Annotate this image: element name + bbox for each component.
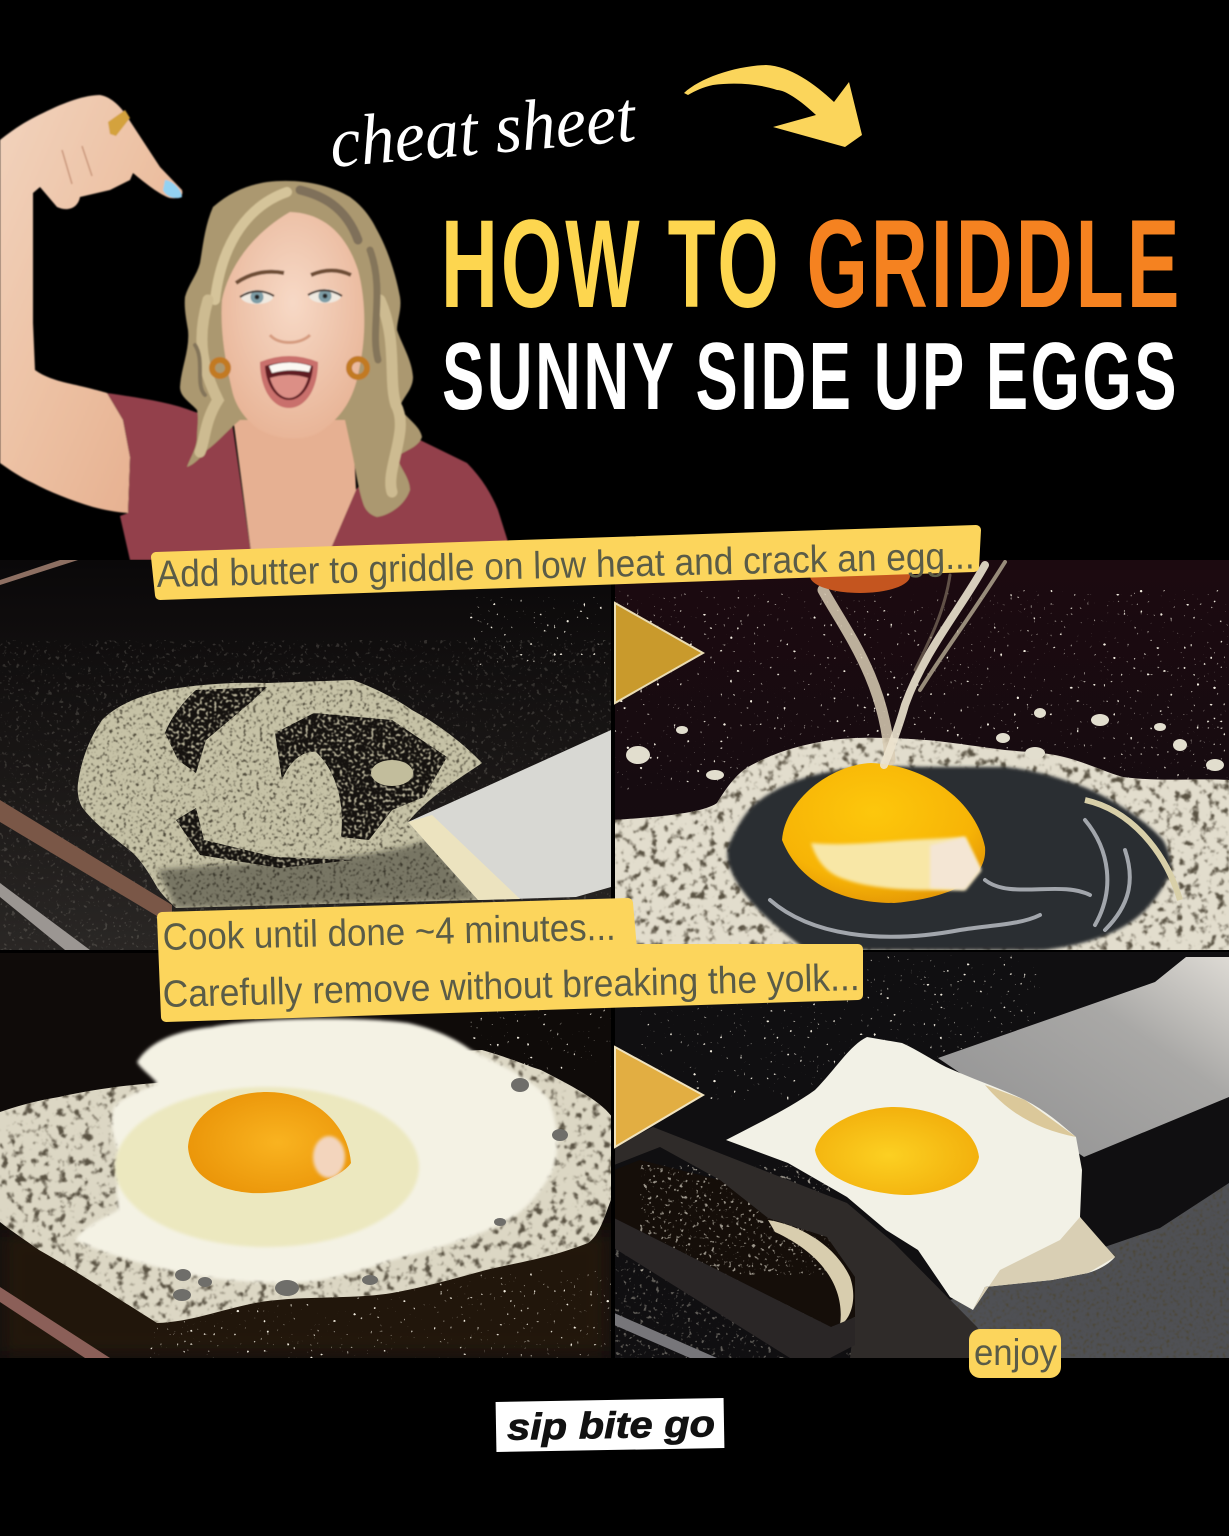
griddle lower bar: [0, 883, 90, 950]
caption background: [156, 530, 976, 595]
neck and chest: [232, 410, 356, 560]
lower griddle bar: [614, 1313, 717, 1358]
light streaks on griddle: [770, 820, 1130, 937]
handle slot interior: [614, 1160, 855, 1327]
griddle rim: [0, 1287, 110, 1358]
fried egg: [726, 1037, 1115, 1310]
egg crust in slot: [768, 1220, 853, 1325]
spatula handle upper arm: [614, 1127, 997, 1358]
photo: woman pointing: [0, 95, 509, 560]
handwritten label: cheat sheet: cheat sheet: [326, 76, 640, 183]
gold ring: [108, 110, 130, 136]
dark patches in butter: [165, 687, 447, 868]
top right oil glints: [470, 597, 605, 667]
egg white: [75, 1019, 557, 1283]
lower foam shade: [157, 840, 478, 908]
title line 2: SUNNY SIDE UP EGGS: [442, 323, 1177, 430]
spatula handle lower arm: [614, 1218, 855, 1358]
mouth: [260, 356, 318, 408]
logo: sip bite go: sip bite go: [507, 1403, 715, 1448]
panel: cracking an egg: [614, 559, 1229, 950]
yolk: [782, 763, 985, 903]
panel: butter melting on griddle: [0, 560, 611, 950]
caption text: remove: Carefully remove without breaking the yolk...: [162, 957, 860, 1016]
bubbles around egg: [173, 1078, 568, 1301]
panel: egg cooked on griddle: [0, 953, 612, 1358]
spatula blade: [938, 957, 1229, 1157]
yolk: [188, 1092, 351, 1193]
egg shell: [810, 574, 910, 593]
blue nail: [163, 180, 182, 198]
hair: [180, 181, 422, 517]
shirt: [107, 393, 509, 560]
caption text: Add butter to griddle on low heat and crack an egg...: [156, 535, 975, 596]
face: [222, 212, 364, 439]
title: [441, 195, 1179, 430]
caption: enjoy: enjoy: [974, 1332, 1057, 1373]
butter line curve: [1085, 800, 1180, 900]
butter ring: [614, 738, 1229, 950]
top right specks: [470, 1008, 611, 1070]
earrings: [212, 359, 367, 377]
griddle top edge: [0, 560, 78, 585]
panel: lifting egg with spatula: [614, 952, 1229, 1358]
arrow: curved yellow arrow: [684, 65, 862, 147]
logo: sip bite go: [496, 1398, 724, 1452]
griddle droplets: [640, 955, 1040, 1100]
white dish: [408, 730, 611, 900]
title line 1: HOW TO GRIDDLE: [441, 195, 1179, 335]
griddle lit surface: [950, 1183, 1229, 1358]
slot droplets: [640, 1165, 830, 1275]
pouring egg white stream: [823, 562, 1005, 765]
butter droplets: [626, 708, 1224, 780]
caption: add butter: [156, 530, 976, 596]
cooked inner white: [115, 1087, 419, 1247]
griddle speckles: [615, 590, 1229, 790]
yolk: [815, 1107, 979, 1195]
eyes and brows: [236, 270, 351, 304]
melted butter: [78, 680, 482, 908]
caption: cook and remove: [162, 903, 860, 1017]
cleared griddle surface: [727, 766, 1171, 950]
arrow: first step triangle: [615, 603, 703, 703]
arm and hand: [0, 95, 182, 513]
hair highlights: [195, 190, 400, 492]
nose: [270, 335, 310, 342]
griddle rim: [0, 800, 172, 925]
large butter bubble: [371, 760, 413, 786]
caption text: cook: Cook until done ~4 minutes...: [162, 907, 616, 959]
caption background: [162, 903, 858, 1017]
griddle speckle texture: [0, 640, 611, 950]
bottom droplets: [150, 1270, 611, 1358]
griddle speckles under handle: [615, 1250, 855, 1358]
arrow: second step triangle: [615, 1047, 703, 1147]
butter foam: [0, 1050, 612, 1323]
